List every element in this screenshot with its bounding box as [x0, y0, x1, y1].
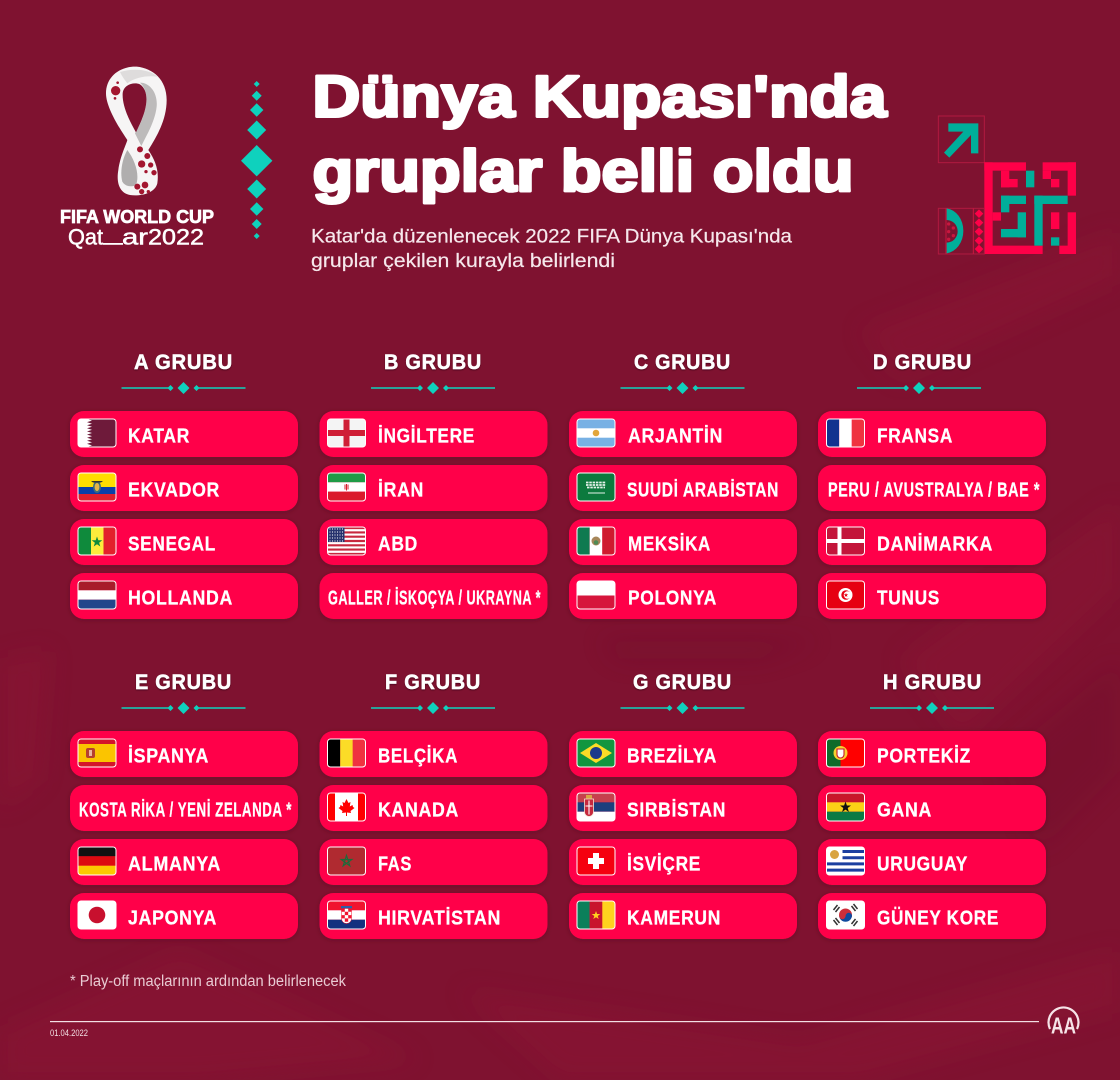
team: Portekiz — [818, 731, 1046, 777]
group F heading: F GRUBU — [385, 670, 481, 694]
flag: Brazil — [577, 739, 615, 767]
flag: Denmark — [826, 527, 864, 555]
diamond column ornament — [241, 81, 272, 239]
team: Kamerun: KAMERUN — [627, 906, 721, 930]
team: Kanada: KANADA — [378, 798, 459, 822]
group D heading: D GRUBU — [873, 350, 972, 374]
team: Belçika: BELÇİKA — [378, 744, 458, 768]
team: İran: İRAN — [378, 478, 424, 502]
team: Güney Kore — [818, 893, 1046, 939]
flag: Portugal — [826, 739, 864, 767]
team: Gana: GANA — [877, 798, 932, 822]
flag: Croatia — [328, 901, 366, 929]
flag: Argentina — [577, 419, 615, 447]
team: Sırbistan: SIRBİSTAN — [627, 798, 726, 822]
flag: Switzerland — [577, 847, 615, 875]
logo host line: ar — [122, 224, 148, 250]
group G heading — [620, 670, 744, 714]
flag: Germany — [78, 847, 116, 875]
team: Tunus — [818, 573, 1046, 619]
flag: Spain — [78, 739, 116, 767]
team: Hırvatistan: HIRVATİSTAN — [378, 906, 501, 930]
divider — [371, 382, 495, 394]
flag: Qatar — [78, 419, 116, 447]
flag: Uruguay — [826, 847, 864, 875]
team: Ekvador: EKVADOR — [128, 478, 220, 502]
team: İngiltere: İNGİLTERE — [378, 424, 475, 448]
team: Brezilya: BREZİLYA — [627, 744, 717, 768]
flag: Iran — [328, 473, 366, 501]
group D heading — [857, 350, 981, 394]
team: Brezilya — [569, 731, 797, 777]
group A heading — [122, 350, 246, 394]
geometric ornament — [938, 116, 1076, 254]
team: Sırbistan — [569, 785, 797, 831]
trophy ribbon emblem — [106, 67, 167, 195]
flag: Mexico — [577, 527, 615, 555]
group B heading — [371, 350, 495, 394]
team: Uruguay: URUGUAY — [877, 852, 968, 876]
team: Tunus: TUNUS — [877, 586, 940, 610]
group C heading — [620, 350, 744, 394]
team: Kosta Rika / Yeni Zelanda playoff — [70, 785, 298, 831]
team: Fransa: FRANSA — [877, 424, 953, 448]
subtitle: Katar'da düzenlenecek 2022 FIFA Dünya Kupası'nda — [311, 226, 792, 248]
ornament: arrow box — [938, 116, 984, 163]
footnote: * Play-off maçlarının ardından belirlenecek — [70, 973, 346, 990]
team: Hollanda — [70, 573, 298, 619]
group B heading: B GRUBU — [384, 350, 482, 374]
team: İspanya — [70, 731, 298, 777]
team: ABD — [320, 519, 548, 565]
group H heading: H GRUBU — [883, 670, 982, 694]
team: Danimarka — [818, 519, 1046, 565]
team: Meksika: MEKSİKA — [628, 532, 711, 556]
divider — [620, 382, 744, 394]
team: Senegal: SENEGAL — [128, 532, 216, 556]
flag: Tunisia — [826, 581, 864, 609]
divider — [870, 702, 994, 714]
team: Almanya — [70, 839, 298, 885]
logo host line — [68, 224, 204, 250]
flag: Saudi Arabia — [577, 473, 615, 501]
team: Ekvador — [70, 465, 298, 511]
flag: Netherlands — [78, 581, 116, 609]
team: Almanya: ALMANYA — [128, 852, 221, 876]
team: Arjantin — [569, 411, 797, 457]
team: Gana — [818, 785, 1046, 831]
icon: AA agency logo: AA — [1051, 1012, 1076, 1038]
team: Arjantin: ARJANTİN — [628, 424, 723, 448]
logo: FIFA World Cup Qatar 2022 — [60, 67, 214, 250]
team: Polonya — [569, 573, 797, 619]
team: Katar: KATAR — [128, 424, 190, 448]
icon: AA agency logo — [1048, 1007, 1078, 1038]
team: Fransa — [818, 411, 1046, 457]
team: Polonya: POLONYA — [628, 586, 717, 610]
team: Fas: FAS — [378, 852, 412, 876]
flag: Poland — [577, 581, 615, 609]
flag: Ecuador — [78, 473, 116, 501]
flag: Senegal — [78, 527, 116, 555]
team: Danimarka: DANİMARKA — [877, 532, 993, 556]
flag: Ghana — [826, 793, 864, 821]
flag: Belgium — [328, 739, 366, 767]
team: Galler / İskoçya / Ukrayna playoff: GALLER / İSKOÇYA / UKRAYNA * — [328, 586, 541, 610]
team: Japonya: JAPONYA — [128, 906, 217, 930]
team: Kamerun — [569, 893, 797, 939]
divider — [371, 702, 495, 714]
group E heading: E GRUBU — [135, 670, 232, 694]
divider — [122, 702, 246, 714]
title: Dünya Kupası'nda — [312, 64, 887, 130]
team: Suudi Arabistan — [569, 465, 797, 511]
team: İspanya: İSPANYA — [128, 744, 209, 768]
team: Galler / İskoçya / Ukrayna playoff — [320, 573, 548, 619]
team: Kosta Rika / Yeni Zelanda playoff: KOSTA RİKA / YENİ ZELANDA * — [79, 798, 292, 822]
divider — [620, 702, 744, 714]
flag: France — [826, 419, 864, 447]
team: Japonya — [70, 893, 298, 939]
team: Meksika — [569, 519, 797, 565]
logo host line: Qat — [68, 224, 103, 250]
flag: Morocco — [328, 847, 366, 875]
flag: USA — [328, 527, 366, 555]
team: Senegal — [70, 519, 298, 565]
team: İran — [320, 465, 548, 511]
group A heading: A GRUBU — [134, 350, 233, 374]
flag: Cameroon — [577, 901, 615, 929]
team: Güney Kore: GÜNEY KORE — [877, 906, 999, 930]
flag: South Korea — [826, 901, 864, 929]
logo host line: 2022 — [148, 224, 204, 250]
title: gruplar belli oldu — [312, 139, 854, 204]
team: Portekiz: PORTEKİZ — [877, 744, 971, 768]
team: Peru / Avustralya / BAE playoff — [818, 465, 1046, 511]
team: Belçika — [320, 731, 548, 777]
divider — [122, 382, 246, 394]
flag: Japan — [78, 901, 116, 929]
team: Hollanda: HOLLANDA — [128, 586, 233, 610]
team: İsviçre: İSVİÇRE — [627, 852, 701, 876]
flag: Canada — [328, 793, 366, 821]
logo wordmark: FIFA WORLD CUP — [60, 206, 214, 227]
team: Hırvatistan — [320, 893, 548, 939]
subtitle — [311, 226, 792, 272]
team: Katar — [70, 411, 298, 457]
group G heading: G GRUBU — [633, 670, 732, 694]
team: Suudi Arabistan: SUUDİ ARABİSTAN — [627, 478, 779, 502]
ornament: half circle box — [938, 208, 984, 254]
title — [312, 64, 887, 204]
team: İngiltere — [320, 411, 548, 457]
group E heading — [122, 670, 246, 714]
divider — [857, 382, 981, 394]
group F heading — [371, 670, 495, 714]
team: Fas — [320, 839, 548, 885]
group C heading: C GRUBU — [634, 350, 731, 374]
team: ABD: ABD — [378, 532, 418, 556]
team: İsviçre — [569, 839, 797, 885]
team: Uruguay — [818, 839, 1046, 885]
ornament: maze — [984, 162, 1076, 254]
flag: Serbia — [577, 793, 615, 821]
team: Kanada — [320, 785, 548, 831]
subtitle: gruplar çekilen kurayla belirlendi — [311, 250, 615, 272]
group H heading — [870, 670, 994, 714]
flag: England — [328, 419, 366, 447]
footer rule and date: 01.04.2022 — [50, 1028, 88, 1038]
